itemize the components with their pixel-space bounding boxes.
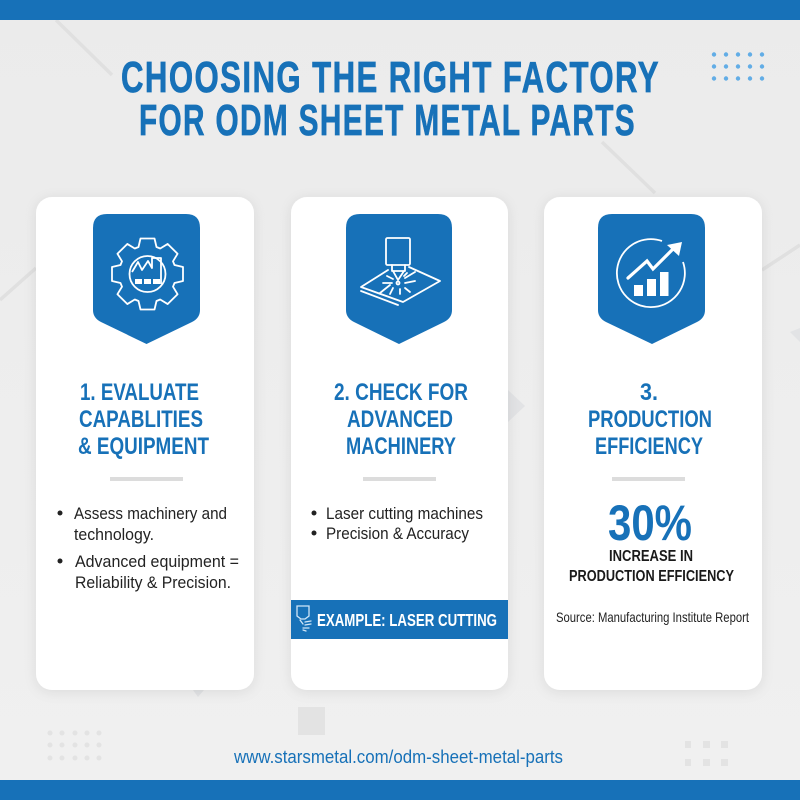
bullet list <box>58 504 239 592</box>
footer url: www.starsmetal.com/odm-sheet-metal-parts <box>233 746 563 767</box>
bullet list: Laser cutting machines <box>326 504 483 523</box>
bullet list: Assess machinery and <box>74 504 227 523</box>
panel: evaluate capabilities <box>36 197 254 690</box>
example banner: EXAMPLE: LASER CUTTING <box>317 610 497 630</box>
heading: ADVANCED <box>347 406 453 433</box>
panel: production efficiency <box>544 197 762 690</box>
heading <box>334 379 468 460</box>
bottom bar <box>0 780 800 800</box>
bullet list: Reliability & Precision. <box>75 573 231 592</box>
heading: EFFICIENCY <box>595 433 703 460</box>
source note: Source: Manufacturing Institute Report <box>556 609 749 625</box>
heading: PRODUCTION <box>588 406 712 433</box>
heading <box>588 379 712 460</box>
panel: advanced machinery <box>291 197 508 690</box>
heading: 2. CHECK FOR <box>334 379 468 406</box>
bullet list: Advanced equipment = <box>75 552 239 571</box>
decorative dots: top right <box>712 52 764 81</box>
example banner <box>291 600 508 639</box>
heading: MACHINERY <box>346 433 456 460</box>
heading: CAPABLITIES <box>79 406 203 433</box>
decorative bottom shapes <box>48 707 728 766</box>
heading: & EQUIPMENT <box>78 433 209 460</box>
top bar <box>0 0 800 20</box>
bullet list: technology. <box>74 525 154 544</box>
bullet list <box>312 504 483 543</box>
bullet list: Precision & Accuracy <box>326 524 469 543</box>
statistic: 30% <box>608 495 692 551</box>
icon: laser cutter <box>346 214 452 344</box>
icon: growth chart <box>598 214 705 344</box>
statistic: PRODUCTION EFFICIENCY <box>569 568 734 585</box>
statistic <box>569 495 734 585</box>
heading <box>78 379 209 460</box>
statistic: INCREASE IN <box>609 548 693 565</box>
heading: 1. EVALUATE <box>80 379 199 406</box>
icon: factory gear <box>93 214 200 344</box>
title <box>121 53 660 145</box>
heading: 3. <box>640 379 658 406</box>
